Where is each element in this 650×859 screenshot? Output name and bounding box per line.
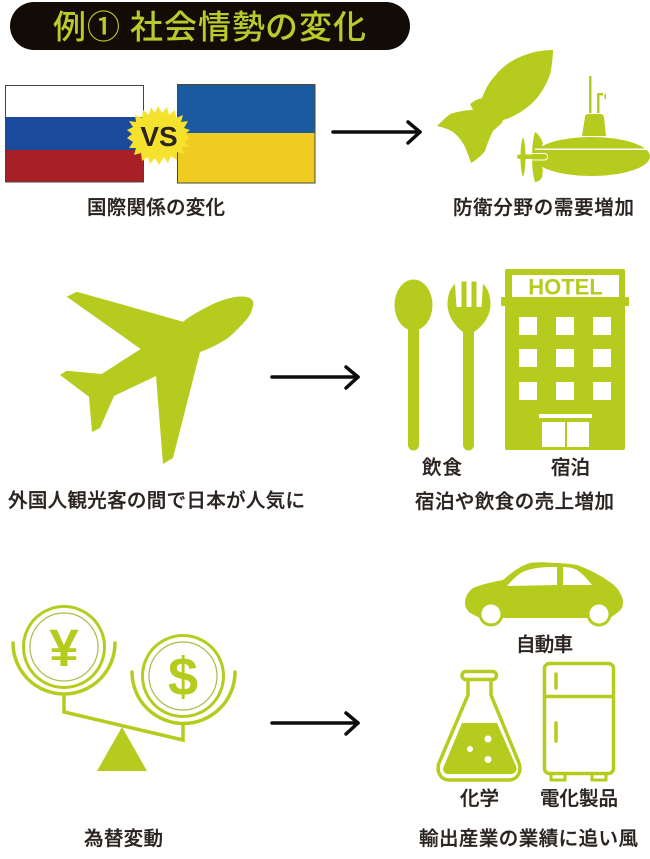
icon: fork (448, 282, 490, 451)
icon: rocket (437, 50, 553, 163)
label: foreign tourists: 外国人観光客の間で日本が人気に (8, 490, 305, 512)
icon: flask (438, 672, 520, 780)
label: international relations: 国際関係の変化 (87, 197, 225, 219)
yen coin (13, 606, 115, 694)
dollar coin (132, 636, 235, 724)
label: exchange rate: 為替変動 (84, 828, 163, 850)
icon: car (465, 562, 623, 626)
icon: airplane (60, 292, 253, 464)
label: electric products: 電化製品 (540, 788, 618, 810)
title banner: 例①社会情勢の変化 (53, 8, 366, 46)
fulcrum (97, 727, 147, 771)
label: automobile: 自動車 (516, 634, 573, 656)
label: defense demand: 防衛分野の需要増加 (453, 197, 634, 219)
icon: hotel: HOTEL (528, 274, 603, 300)
label: food: 飲食 (422, 457, 462, 479)
beam (64, 695, 183, 740)
arrow: row 1 (333, 122, 420, 143)
icon: submarine (517, 76, 650, 182)
flag: Russia (5, 85, 144, 182)
icon: hotel (501, 269, 629, 450)
arrow: row 3 (272, 713, 358, 734)
icon: spoon (394, 280, 432, 451)
VS badge (127, 106, 190, 165)
icon: refrigerator (544, 664, 614, 780)
label: export industry tailwind: 輸出産業の業績に追い風 (419, 828, 638, 850)
label: chemistry: 化学 (460, 788, 499, 810)
dollar coin: $ (168, 647, 198, 707)
VS badge: VS (140, 121, 178, 152)
title banner (10, 2, 410, 50)
flag: Ukraine (177, 84, 315, 183)
icon: currency scale (13, 606, 235, 771)
label: lodging and food sales: 宿泊や飲食の売上増加 (415, 491, 614, 513)
yen coin: ¥ (49, 619, 79, 678)
label: lodging: 宿泊 (551, 457, 590, 479)
arrow: row 2 (272, 367, 358, 388)
